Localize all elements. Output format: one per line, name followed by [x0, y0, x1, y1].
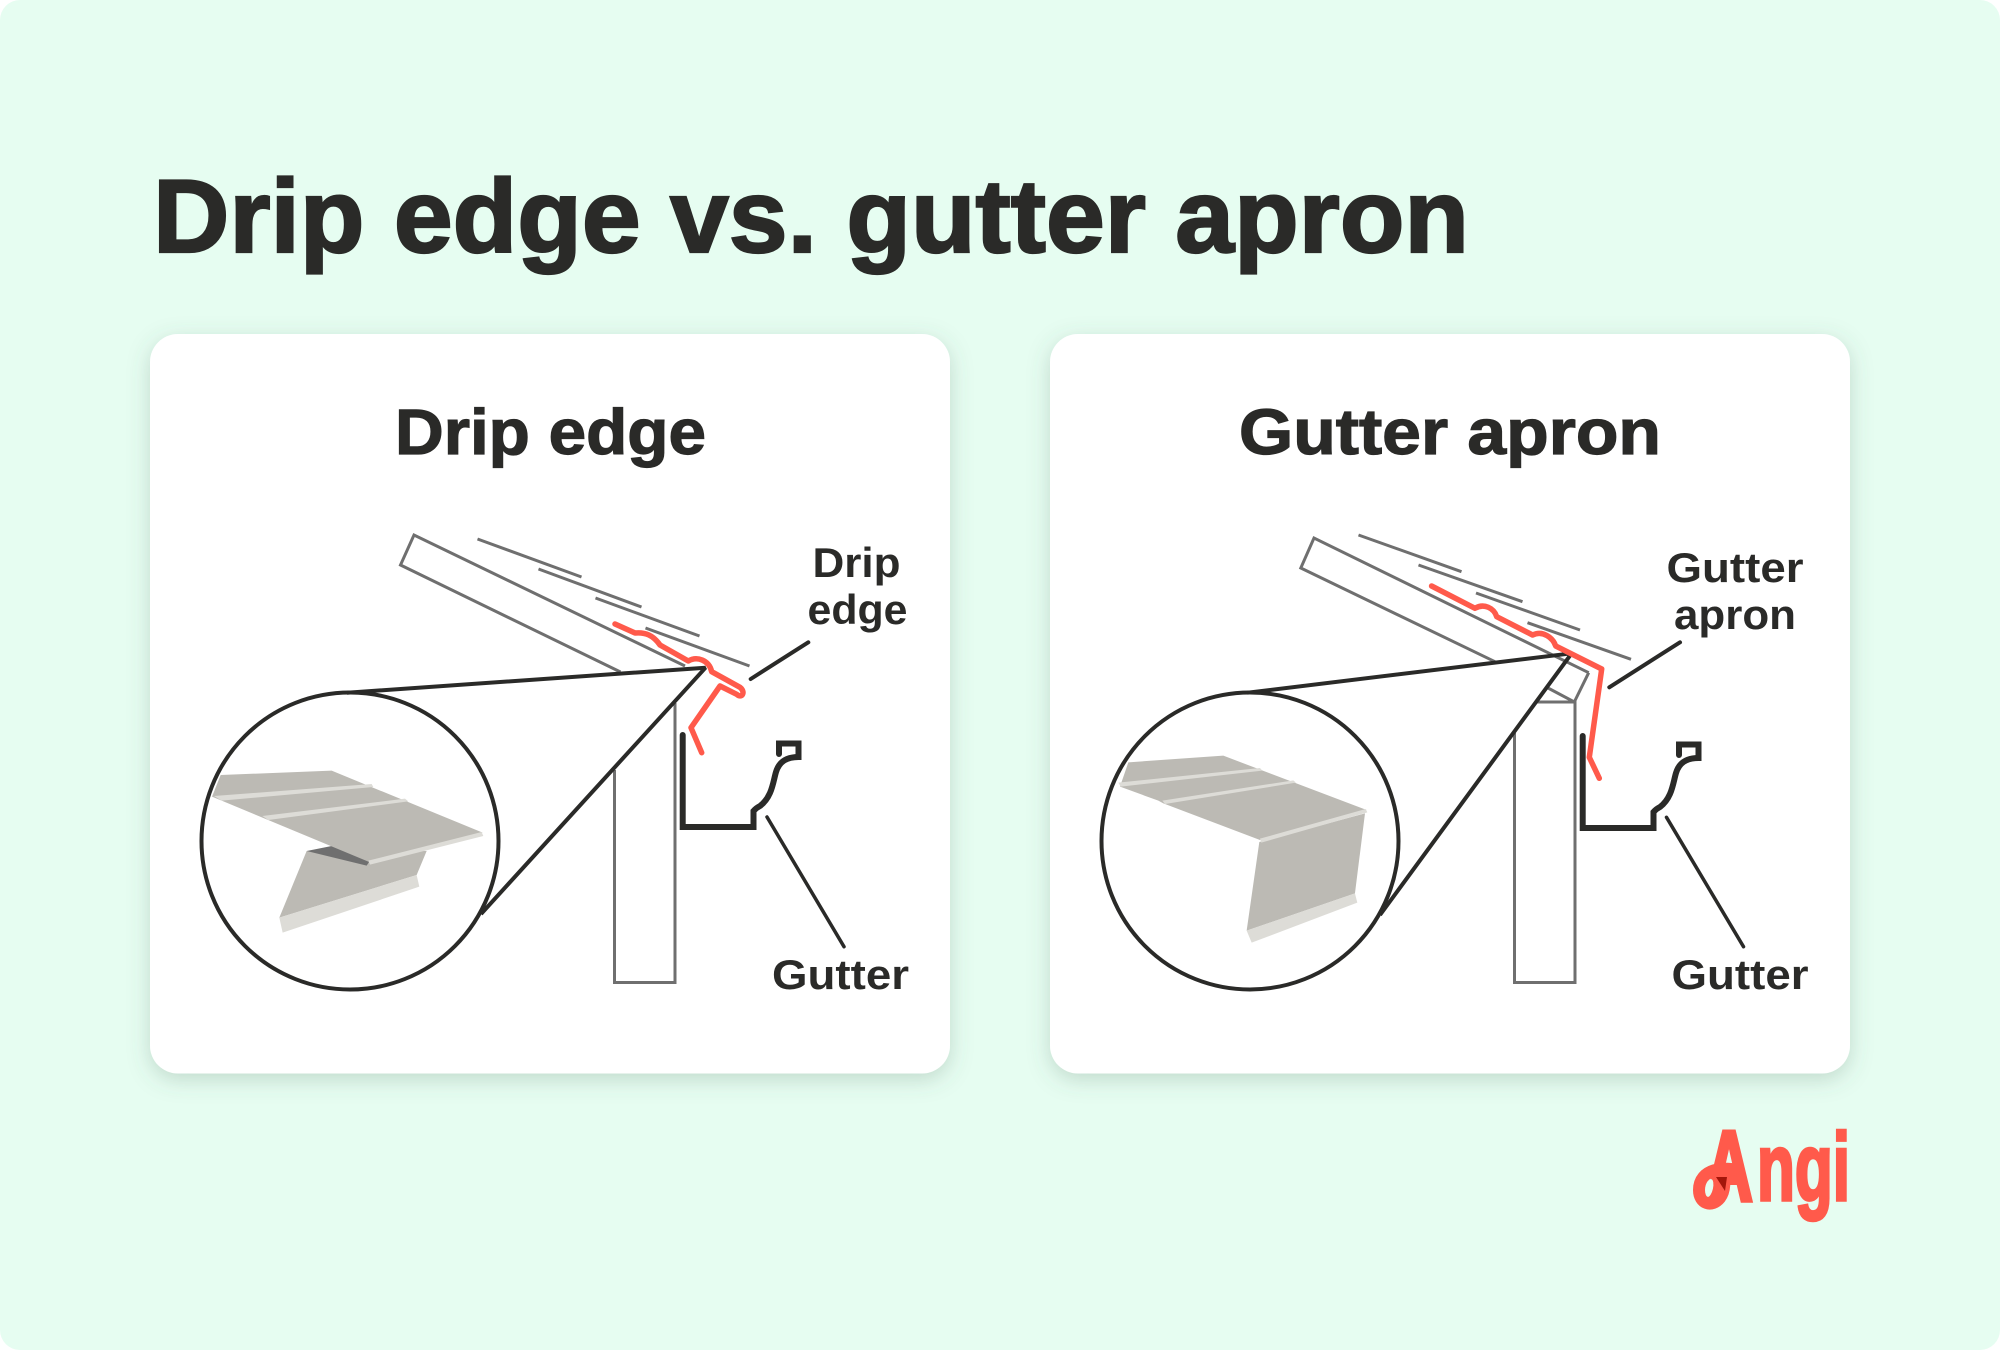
panel: drip edge — [150, 334, 950, 1074]
diagram: roof structure — [400, 535, 750, 982]
panel: gutter apron — [1050, 334, 1850, 1074]
diagram: gutter — [683, 735, 798, 827]
diagram: magnifier circle and cone — [202, 668, 706, 990]
heading: drip edge: Drip edge — [395, 396, 706, 468]
diagram: magnified metal — [1118, 756, 1367, 943]
logo: Angi: A — [1705, 1110, 1753, 1222]
diagram: magnified metal — [212, 771, 483, 933]
logo: Angi: ngi — [1757, 1114, 1850, 1221]
callout: gutter apron: apron — [1674, 591, 1796, 638]
title: Drip edge vs. gutter apron — [153, 159, 1469, 275]
callout: gutter: Gutter — [1672, 951, 1808, 998]
callout: gutter: Gutter — [772, 951, 909, 998]
diagram: gutter apron flashing — [1432, 586, 1602, 778]
callout: drip edge — [751, 539, 908, 679]
diagram: roof structure — [1301, 535, 1631, 982]
diagram: gutter — [1583, 736, 1698, 828]
diagram: magnifier circle and cone — [1102, 653, 1572, 990]
callout: gutter apron: Gutter — [1666, 544, 1804, 591]
diagram: drip edge flashing — [615, 624, 743, 753]
callout: gutter apron — [1609, 544, 1804, 687]
callout: drip edge: Drip — [812, 539, 900, 586]
callout: gutter — [767, 817, 909, 998]
callout: gutter — [1666, 817, 1808, 998]
logo: Angi — [1699, 1110, 1850, 1222]
callout: drip edge: edge — [808, 586, 908, 633]
heading: gutter apron: Gutter apron — [1239, 396, 1661, 468]
